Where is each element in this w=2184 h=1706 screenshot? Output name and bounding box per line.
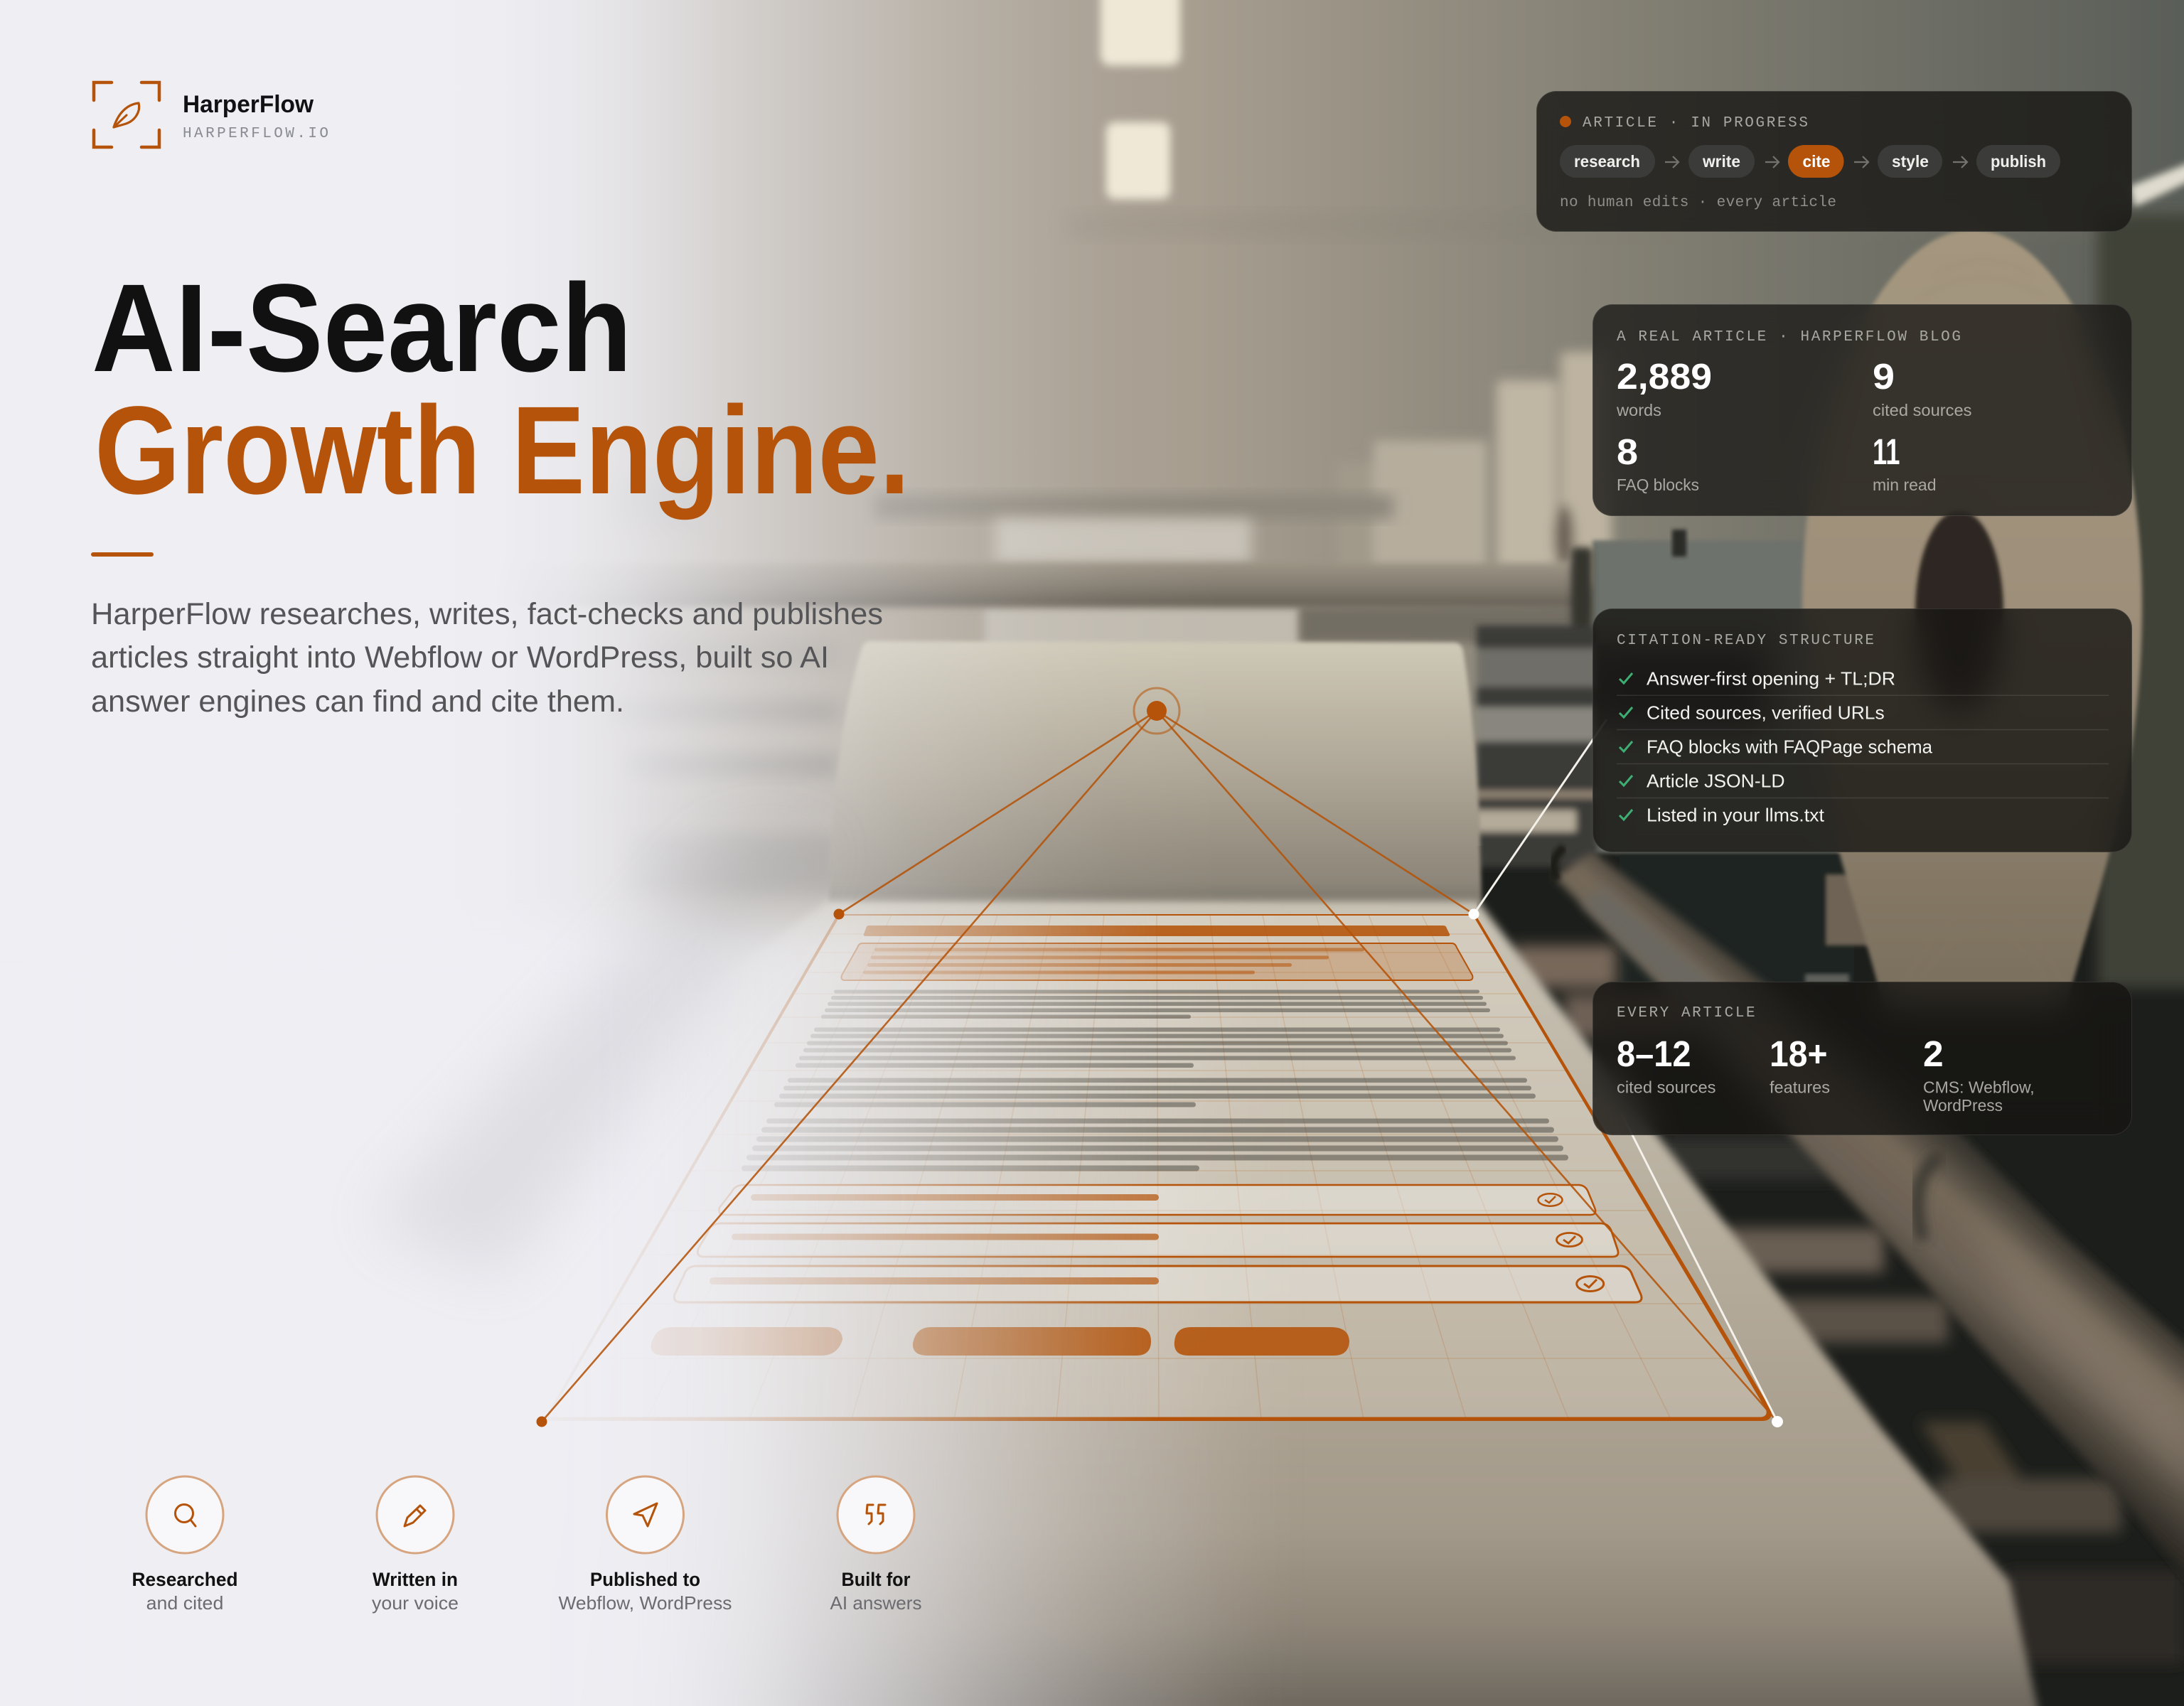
feature: published: Webflow, WordPress (559, 1592, 732, 1614)
stat: FAQ blocks: FAQ blocks (1617, 475, 1699, 493)
accent rule (91, 552, 154, 557)
feature: written: your voice (372, 1592, 459, 1614)
FAQ block 2 (697, 1223, 1618, 1257)
intro paragraph: HarperFlow researches, writes, fact-checks and publishes (91, 597, 883, 631)
intro paragraph (91, 597, 883, 719)
pipeline steps: research (1574, 152, 1639, 171)
stat: FAQ blocks: 8 (1617, 431, 1638, 472)
brand url: HARPERFLOW.IO (183, 126, 328, 142)
feature: researched: and cited (146, 1592, 223, 1614)
intro paragraph: answer engines can find and cite them. (91, 685, 624, 719)
feature: written (372, 1476, 459, 1614)
feature: published (559, 1476, 732, 1614)
sheet grid (702, 916, 1736, 1417)
stat: cited sources (1873, 355, 1971, 419)
feature: built for AI: Built for (842, 1569, 911, 1590)
stat: features: 18+ (1769, 1034, 1827, 1073)
stat: min read: 11 (1873, 431, 1900, 472)
panel: article in progress pipeline (1536, 91, 2132, 232)
stat: CMS: WordPress (1922, 1096, 2002, 1115)
panel note: no human edits · every article (1560, 195, 1836, 210)
feature: researched: Researched (132, 1569, 237, 1590)
feature: written: Written in (373, 1569, 458, 1590)
stat: CMS (1922, 1034, 2034, 1115)
panel: a real article stats (1592, 304, 2132, 516)
feature: built for AI (830, 1476, 921, 1614)
feature: researched (132, 1476, 237, 1614)
call-to-action pills (651, 1327, 1349, 1356)
FAQ block 1 (719, 1185, 1595, 1215)
stat: CMS: CMS: Webflow, (1922, 1078, 2034, 1096)
checklist item 5: Listed in your llms.txt (1647, 804, 1824, 825)
icon: navigation arrow (607, 1476, 684, 1553)
panel: citation-ready structure checklist (1592, 608, 2132, 852)
stat: features (1769, 1034, 1830, 1096)
pipeline steps: style (1891, 152, 1928, 171)
intro paragraph: articles straight into Webflow or WordPress, built so AI (91, 640, 829, 675)
FAQ block 3 (674, 1266, 1642, 1302)
title: AI-Search (92, 259, 632, 398)
icon: quote marks (837, 1476, 914, 1553)
sheet outline (545, 914, 1772, 1421)
stat: words: 2,889 (1617, 355, 1712, 397)
pipeline steps: write (1702, 152, 1740, 171)
stat: cited sources (1617, 1034, 1715, 1096)
status dot (1560, 115, 1571, 127)
stat: min read (1873, 431, 1936, 493)
foreground layer: logo, headline, article sheet, feature icons (91, 81, 1783, 1614)
pipeline steps (1560, 145, 2060, 178)
title: Growth Engine. (95, 381, 910, 520)
feature: published: Published to (590, 1569, 700, 1590)
stat: words (1615, 355, 1712, 419)
stat: FAQ blocks (1617, 431, 1699, 493)
body text lines (742, 989, 1568, 1171)
corner anchor: bottom right (1772, 1416, 1783, 1427)
panel heading: EVERY ARTICLE (1617, 1005, 1755, 1021)
panel heading: CITATION-READY STRUCTURE (1617, 633, 1874, 648)
panel heading: ARTICLE · IN PROGRESS (1583, 115, 1807, 131)
stat: min read: min read (1873, 475, 1936, 493)
stat: CMS: 2 (1922, 1034, 1943, 1073)
connector lines from focal point (542, 711, 1777, 1422)
white callout lines (1474, 719, 1777, 1422)
stat: cited sources: cited sources (1617, 1078, 1715, 1096)
stat: cited sources: cited sources (1873, 401, 1971, 419)
TL;DR summary box (842, 943, 1472, 980)
stat: features: features (1769, 1078, 1830, 1096)
corner anchor: top right (1469, 908, 1479, 920)
pipeline steps: publish (1991, 152, 2046, 171)
panel heading: A REAL ARTICLE · HARPERFLOW BLOG (1617, 328, 1961, 345)
checklist item 3: FAQ blocks with FAQPage schema (1647, 736, 1932, 757)
panel: every article stats (1592, 982, 2132, 1135)
focal point (1134, 688, 1179, 734)
brand name: HarperFlow (183, 91, 314, 118)
icon: pencil (377, 1476, 454, 1553)
icon: bracket frame with feather (94, 82, 159, 147)
article title bar (864, 926, 1450, 936)
title (92, 259, 910, 520)
pipeline steps: cite (1802, 152, 1830, 171)
stat: words: words (1615, 401, 1661, 419)
feature: built for AI: AI answers (830, 1592, 921, 1614)
corner anchor: bottom left (536, 1416, 547, 1427)
article sheet in perspective (545, 914, 1772, 1421)
checklist item 2: Cited sources, verified URLs (1647, 702, 1884, 723)
logo (94, 82, 328, 147)
sheet surface (1018, 916, 1766, 1417)
stat: cited sources: 8–12 (1617, 1034, 1691, 1073)
corner anchor: top left (833, 908, 845, 920)
checklist item 1: Answer-first opening + TL;DR (1647, 667, 1895, 689)
icon: search (146, 1476, 223, 1553)
stat: cited sources: 9 (1873, 355, 1894, 397)
checklist item 4: Article JSON-LD (1647, 770, 1784, 791)
